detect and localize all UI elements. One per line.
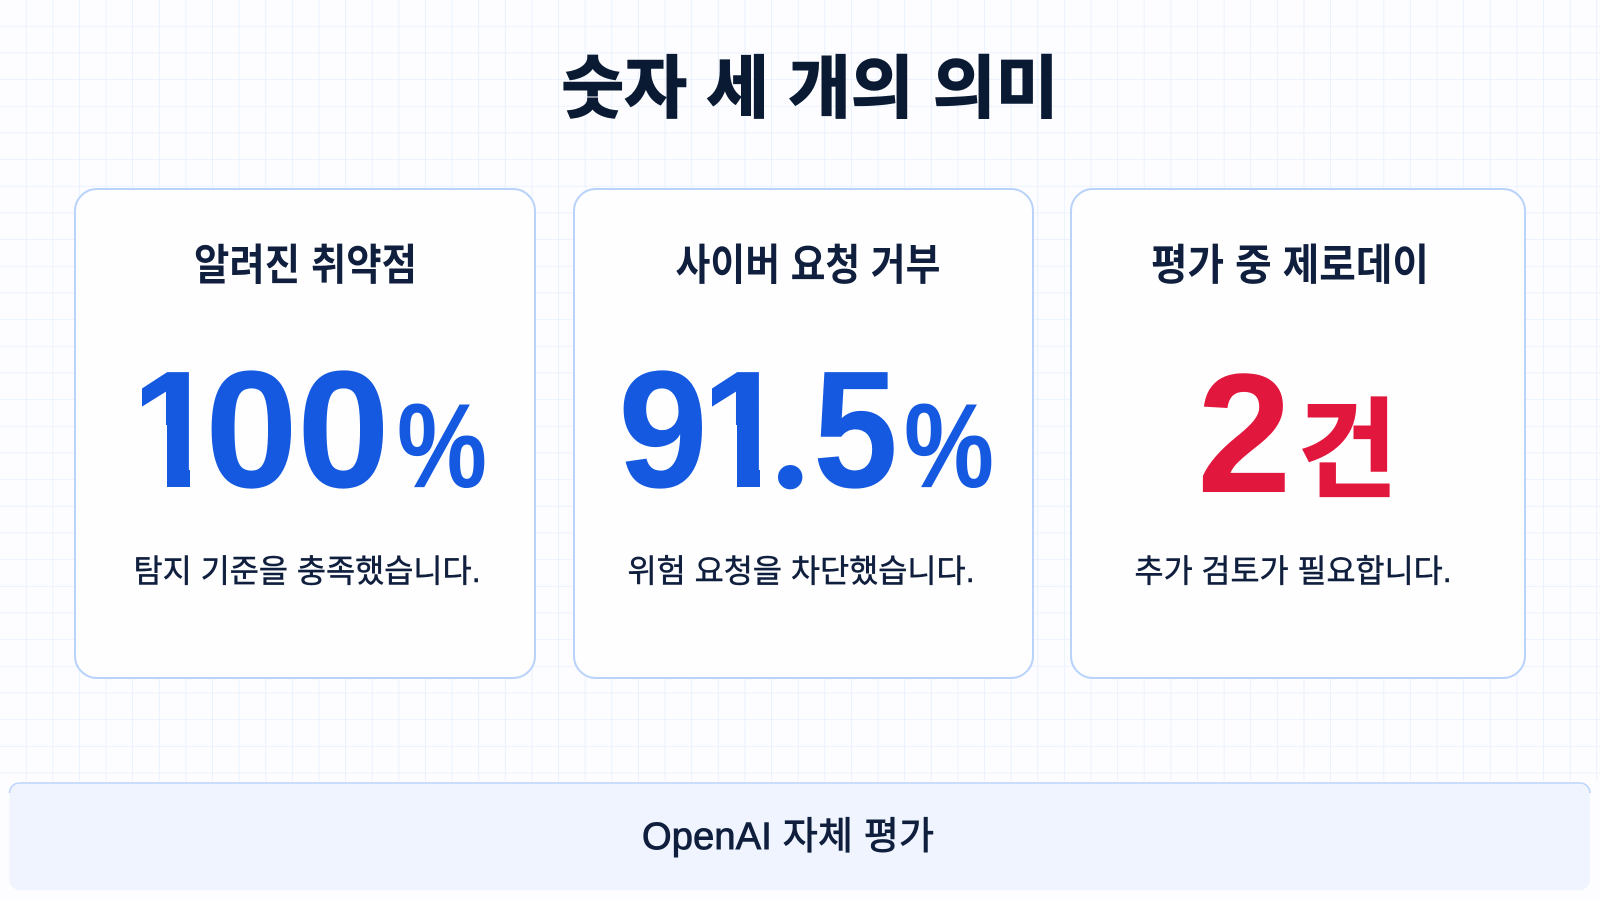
card background	[574, 189, 1033, 678]
stat: 100%: 0	[205, 337, 298, 523]
stat: 91.5%: 1	[697, 337, 790, 523]
card heading: 평가 중 제로데이	[1151, 242, 1429, 290]
description: 탐지 기준을 충족했습니다.	[134, 553, 480, 589]
stat: 100%: 0	[297, 337, 390, 523]
banner text: OpenAI 자체 평가	[642, 816, 934, 858]
stat: 100%: 1	[127, 337, 220, 523]
banner background	[10, 783, 1590, 890]
stat: 91.5%: .	[765, 344, 813, 503]
panel: known vulnerabilities	[75, 189, 535, 678]
stat: 2 cases	[1197, 339, 1397, 529]
footer banner	[10, 783, 1590, 890]
card background	[75, 189, 535, 678]
stat: 91.5%: 5	[813, 337, 898, 523]
description: 위험 요청을 차단했습니다.	[628, 553, 974, 589]
stat: 2 cases: 건	[1298, 364, 1397, 520]
stat: 91.5%: %	[904, 379, 994, 513]
description: 추가 검토가 필요합니다.	[1134, 553, 1452, 589]
stat: 91.5%	[624, 370, 992, 490]
panel: cyber requests refused	[574, 189, 1033, 678]
stat: 100%: %	[397, 379, 487, 513]
card background	[1071, 189, 1525, 678]
stat: 2 cases: 2	[1197, 339, 1292, 529]
stat: 91.5%: 9	[618, 337, 708, 523]
card heading: 사이버 요청 거부	[676, 242, 940, 290]
panel: zero-days during evaluation	[1071, 189, 1525, 678]
title: 숫자 세 개의 의미	[562, 51, 1058, 127]
stat: 100%	[142, 370, 484, 489]
card heading: 알려진 취약점	[194, 242, 417, 290]
